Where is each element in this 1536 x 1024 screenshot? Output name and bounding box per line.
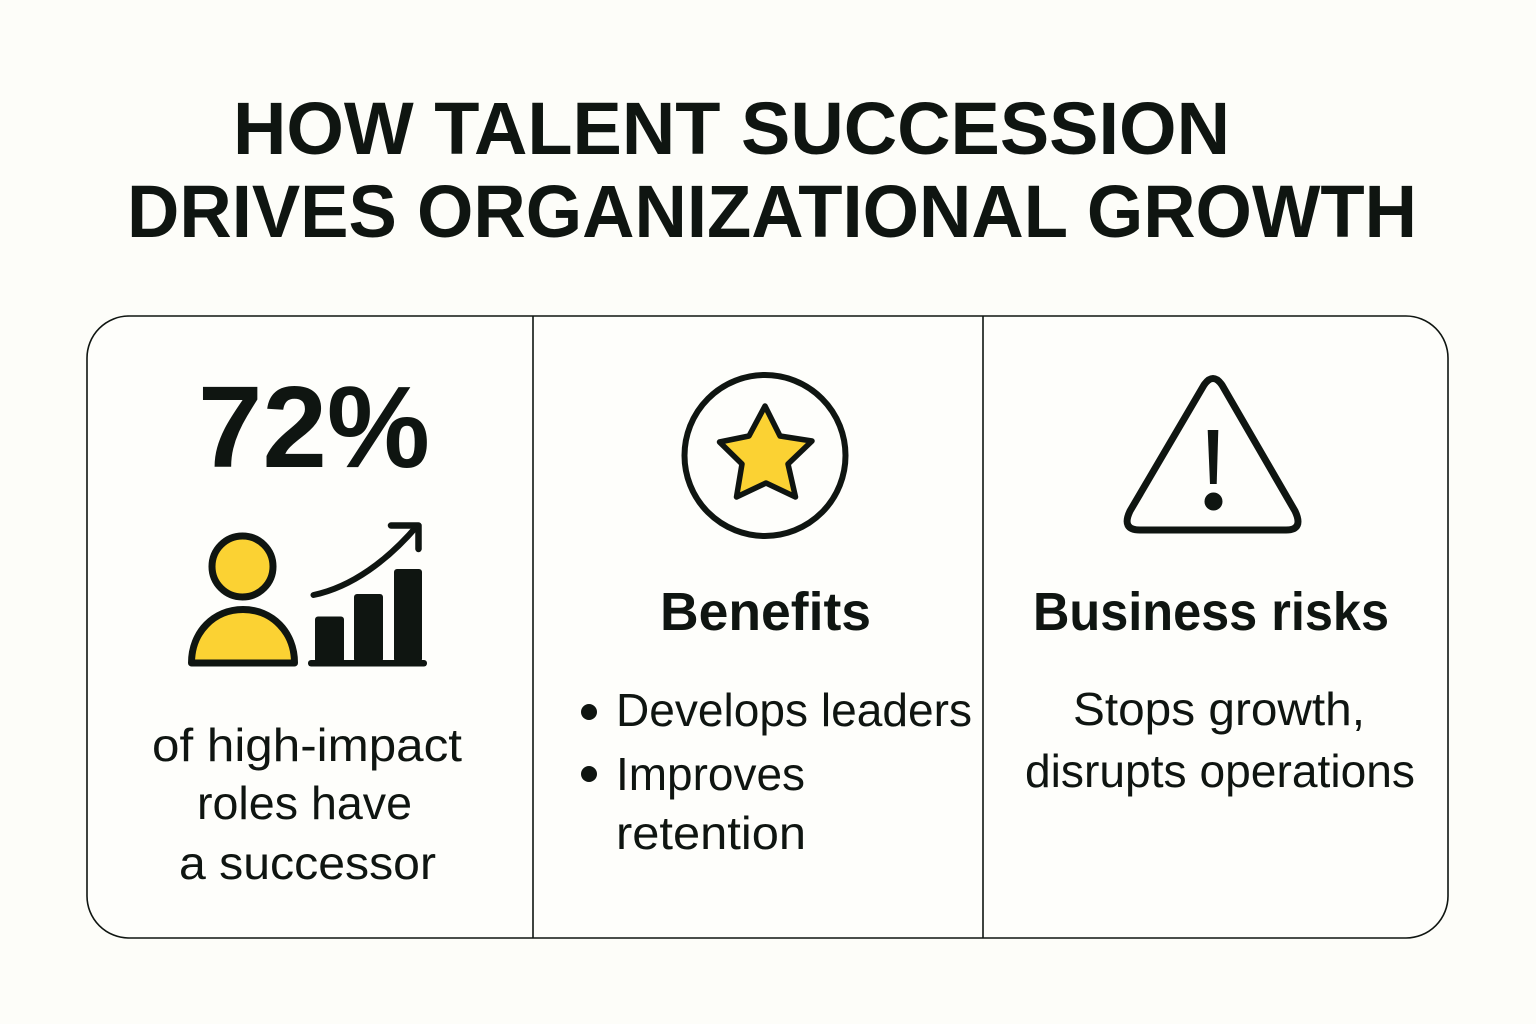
panel: business risks: [1025, 378, 1415, 797]
big number: 72%: [198, 362, 430, 492]
benefits list: retention: [616, 807, 806, 859]
panel: card outline: [87, 316, 1448, 938]
panel: benefits: [581, 375, 972, 859]
benefits list: Develops leaders: [616, 684, 972, 736]
icon: star in circle: [684, 375, 846, 536]
heading: benefits: Benefits: [660, 582, 871, 642]
heading: business risks: Business risks: [1033, 582, 1389, 642]
risks description: [1025, 683, 1415, 797]
title: DRIVES ORGANIZATIONAL GROWTH: [127, 170, 1417, 253]
risks description: disrupts operations: [1025, 745, 1415, 797]
statistic description: [152, 719, 462, 889]
statistic description: roles have: [197, 777, 412, 829]
statistic description: a successor: [179, 837, 436, 889]
icon: person with growth chart: [192, 526, 427, 666]
panel: statistic: [152, 362, 462, 889]
title: [127, 87, 1417, 253]
title: HOW TALENT SUCCESSION: [233, 87, 1230, 170]
benefits list: [581, 684, 972, 859]
benefits list: Improves: [616, 748, 805, 800]
icon: warning triangle: [1127, 378, 1298, 530]
risks description: Stops growth,: [1073, 683, 1365, 735]
statistic description: of high-impact: [152, 719, 462, 771]
